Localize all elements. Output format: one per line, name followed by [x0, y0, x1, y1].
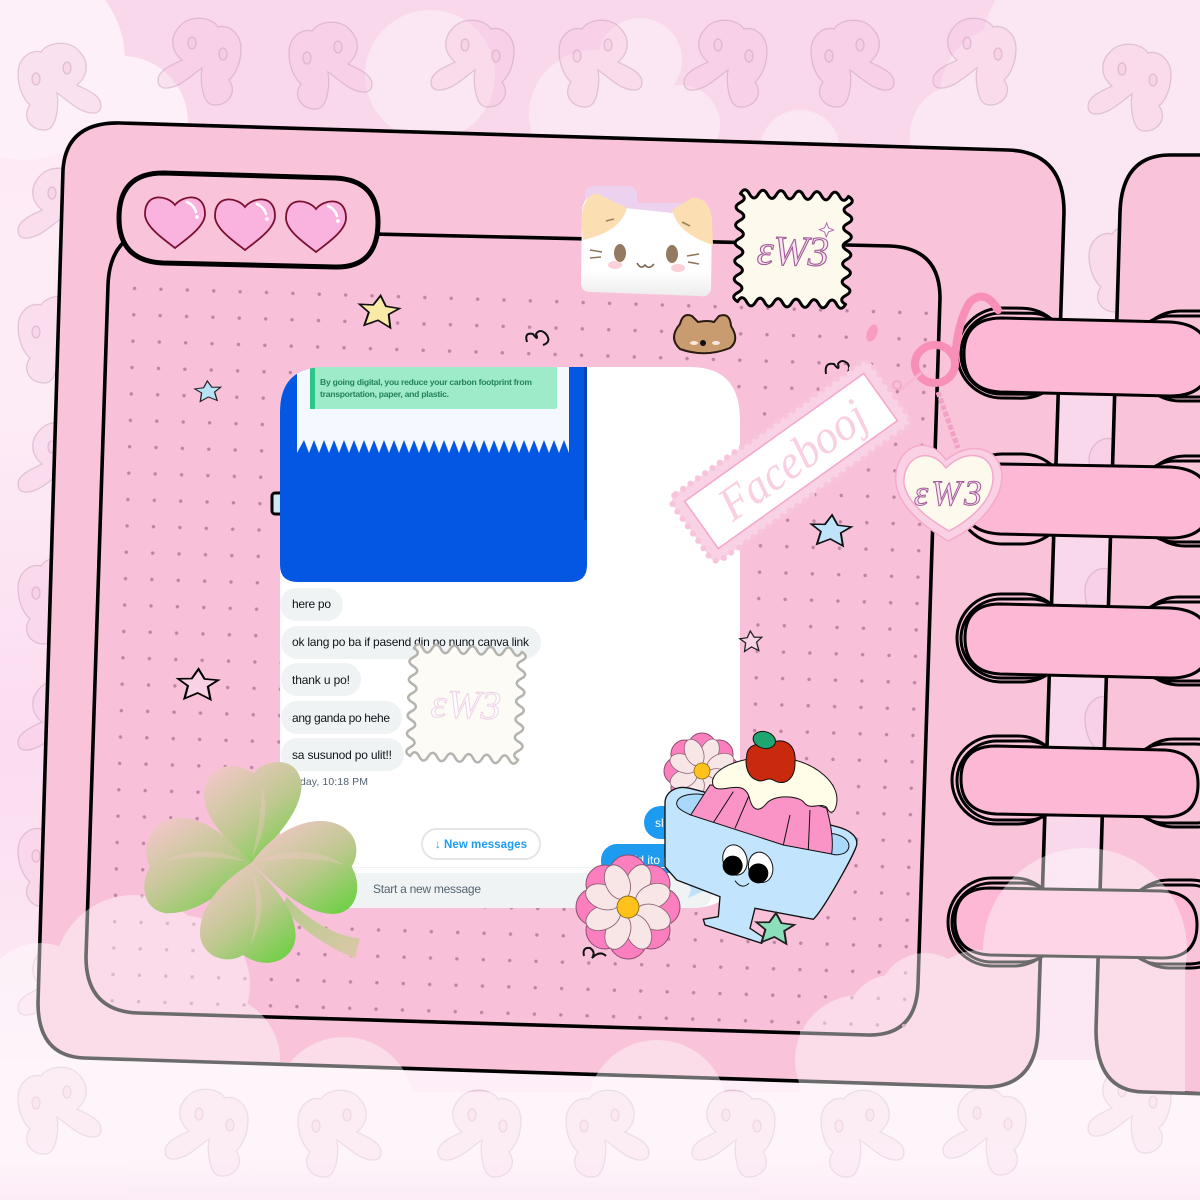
heart 2 [215, 199, 275, 250]
sent bubble 2 [601, 844, 670, 873]
message input: Start a new message [373, 882, 481, 896]
icon: yellow star [357, 293, 401, 329]
sticker: pudding bowl [665, 729, 857, 943]
sticker: clover [144, 762, 360, 963]
panel: chat screenshot [270, 360, 754, 909]
message input [350, 867, 712, 908]
icon: small blue star [194, 380, 222, 402]
new messages button: ↓ New messages [435, 839, 527, 851]
message bubble: thank u po [281, 663, 361, 696]
message bubble: here po: here po [292, 597, 331, 611]
message bubble: ang ganda [281, 701, 402, 734]
sticker: EW heart charm: εW3 [914, 473, 982, 513]
message bubble: thank u po: thank u po! [292, 673, 350, 687]
jelly [691, 785, 832, 854]
sticker: keychain hook and ring [893, 297, 998, 448]
icon: squiggle top [526, 331, 548, 345]
sticker: large flower [576, 855, 680, 959]
sticker: EW stamp: εW3 [756, 228, 830, 276]
icon: star peeking behind chat [272, 493, 284, 514]
message bubble: ang ganda: ang ganda po hehe [292, 711, 390, 725]
blue image message: transportation, paper, and plastic. [320, 389, 449, 399]
message bubble: canva link: ok lang po ba if pasend din po nung canva link [292, 635, 530, 649]
heart 3 [286, 201, 346, 252]
leaf [751, 729, 777, 751]
message bubble: sa susunod [281, 738, 404, 771]
bowl [665, 787, 857, 943]
icon: pale small star [739, 630, 763, 652]
face [719, 842, 776, 886]
icon: hearts [145, 197, 346, 252]
message bubble: here po [280, 588, 343, 621]
sticker: EW heart charm [896, 445, 1002, 541]
timestamp: Yesterday, 10:18 PM [270, 776, 368, 788]
pills and binder rings [948, 308, 1200, 968]
icon: pink outline star [177, 668, 219, 700]
bowl inside right [830, 833, 849, 855]
binder rings [948, 308, 1200, 968]
panel: outer window [38, 123, 1064, 1087]
sticker: cat folder [581, 186, 713, 296]
icon: teal star [755, 912, 795, 944]
overlay clouds [0, 848, 1200, 1200]
icon: squiggle tag [826, 361, 849, 374]
sticker: bear [674, 315, 735, 353]
sent bubble 2: add ito po [624, 853, 677, 867]
blue image message: By going digital, you reduce your carbon footprint from [320, 377, 532, 387]
sticker: Faceboo tag: Facebooj [708, 389, 878, 532]
blue image message [280, 360, 587, 582]
sticker: small flower [664, 733, 740, 809]
icon: large blue star [810, 514, 852, 546]
message bubble: canva link [281, 626, 541, 659]
sticker: EW stamp [734, 190, 852, 308]
sticker: Faceboo tag [668, 358, 914, 564]
sent bubble [644, 806, 664, 839]
sent bubble: sl [655, 816, 664, 830]
icon: pink drop [864, 323, 880, 343]
new messages button [422, 829, 540, 859]
cream [713, 757, 837, 812]
bowl inside left [677, 794, 710, 815]
background clouds [0, 0, 1200, 350]
panel: heart pill [119, 173, 378, 267]
panel: inner dotted page [86, 229, 940, 1035]
message bubble: sa susunod: sa susunod po ulit!! [292, 748, 392, 762]
panel: right window [1096, 155, 1200, 1094]
faded watermark stamp: εW3 [430, 681, 502, 728]
heart 1 [145, 197, 205, 248]
faded watermark stamp [406, 644, 526, 764]
cherry [746, 741, 795, 783]
icon: squiggle bottom [584, 948, 606, 958]
